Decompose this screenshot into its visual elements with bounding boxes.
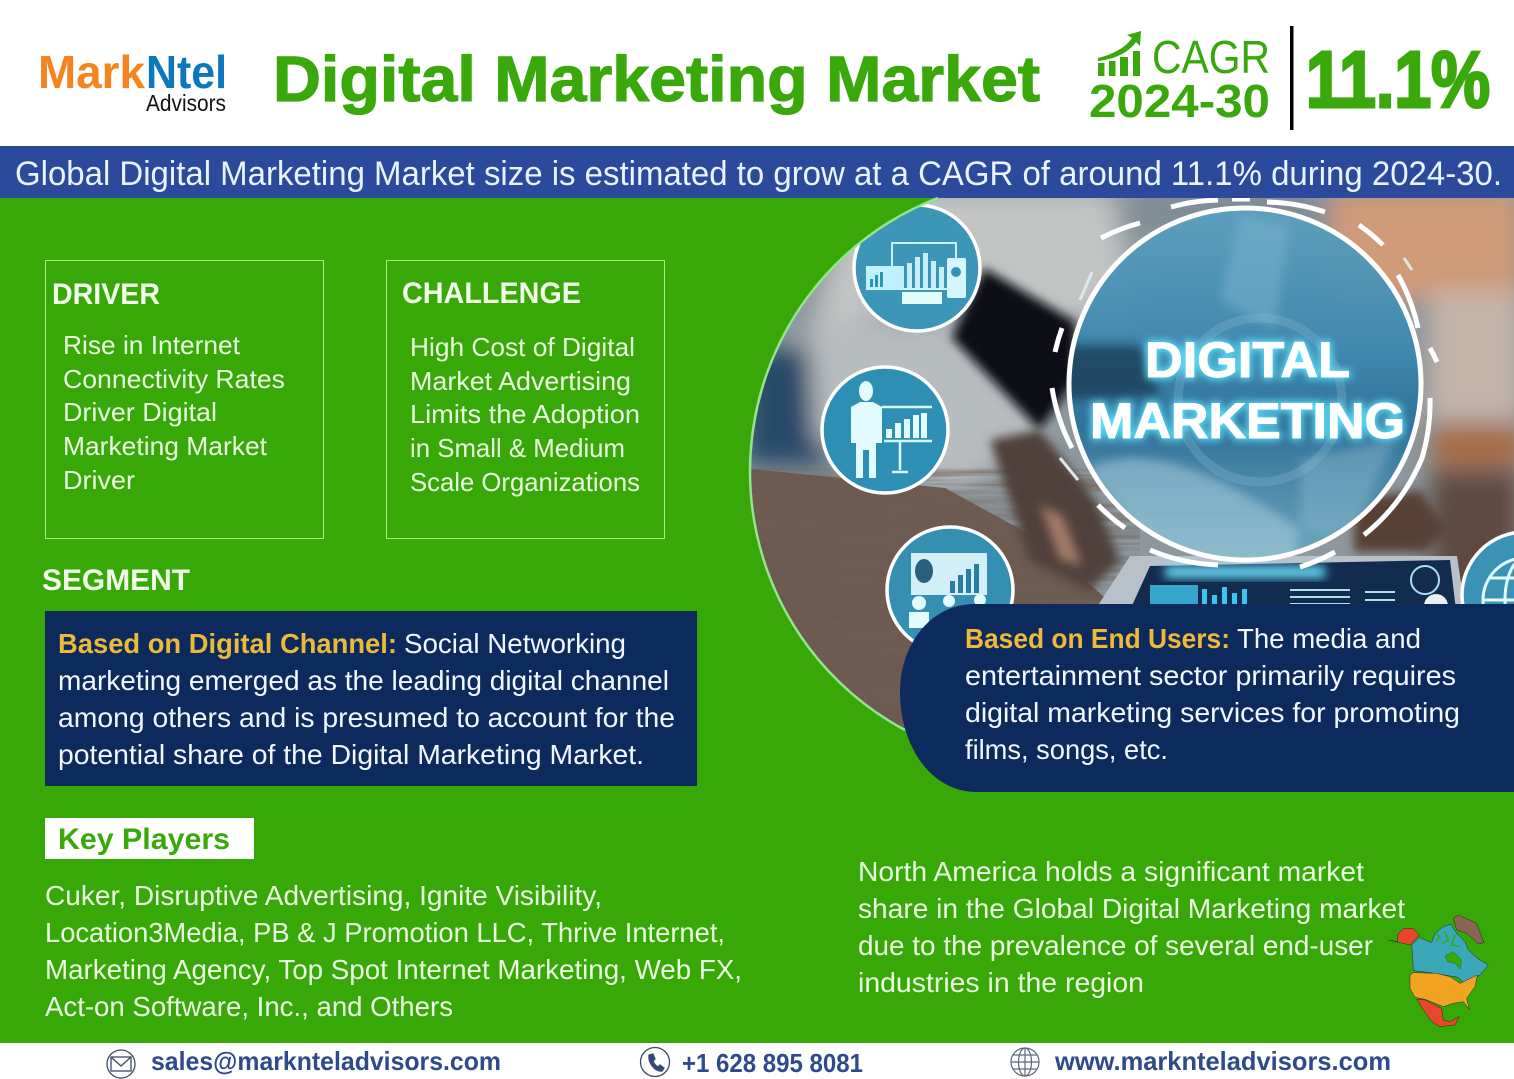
- panel: end users segment: digital marketing services for promoting: [965, 697, 1460, 728]
- icon: team presentation: [887, 527, 1013, 653]
- logo: MarkNtel Advisors: Advisors: [146, 90, 226, 116]
- panel: digital channel segment: marketing emerged as the leading digital channel: [58, 665, 669, 696]
- challenge text: [410, 332, 640, 497]
- lens heading: digital marketing: MARKETING: [1090, 393, 1405, 449]
- logo: MarkNtel Advisors: Ntel: [146, 46, 227, 98]
- panel: digital channel segment: Based on Digital Channel:: [58, 628, 397, 659]
- footer background: [0, 1043, 1514, 1079]
- contact: phone: +1 628 895 8081: [682, 1048, 863, 1078]
- icon: growth bars with arrow: [1098, 31, 1141, 76]
- icon: globe: [1011, 1048, 1039, 1076]
- lens heading: digital marketing: [1090, 332, 1405, 449]
- main lens circle: [1052, 199, 1437, 570]
- icon: presenter with chart: [822, 367, 948, 493]
- panel: digital channel segment: Social Networking: [404, 628, 626, 659]
- panel: end users segment: [900, 604, 1514, 792]
- header background: [0, 0, 1514, 146]
- key players heading: [45, 818, 254, 859]
- photo edge arc: [750, 198, 938, 730]
- panel: digital channel segment: among others and is presumed to account for the: [58, 702, 675, 733]
- driver text: Rise in Internet: [63, 330, 241, 360]
- icon: globe: [1460, 531, 1514, 604]
- CAGR label: CAGR: [1152, 31, 1270, 83]
- driver text: Marketing Market: [63, 431, 268, 461]
- driver text: Connectivity Rates: [63, 364, 285, 394]
- lens heading: digital marketing: DIGITAL: [1145, 332, 1350, 388]
- photo: digital marketing hero: [740, 190, 1514, 750]
- panel: digital channel segment: [45, 611, 697, 786]
- logo: MarkNtel Advisors: [38, 46, 227, 116]
- lens heading: digital marketing: MARKETING: [1090, 393, 1405, 449]
- panel: end users segment: Based on End Users:: [965, 623, 1230, 654]
- icon: North America map: [1388, 915, 1488, 1027]
- panel: end users segment: entertainment sector primarily requires: [965, 660, 1456, 691]
- key players text: Cuker, Disruptive Advertising, Ignite Visibility,: [45, 880, 602, 911]
- driver text: [63, 330, 285, 495]
- driver text: Driver: [63, 465, 135, 495]
- key players text: Marketing Agency, Top Spot Internet Marketing, Web FX,: [45, 954, 742, 985]
- summary banner: Global Digital Marketing Market size is estimated to grow at a CAGR of around 11.1% during 2024-30.: [15, 155, 1502, 193]
- key players heading: Key Players: [58, 823, 230, 856]
- panel: end users segment: The media and: [1237, 623, 1421, 654]
- title: Digital Marketing Market: [273, 43, 1040, 115]
- challenge text: Scale Organizations: [410, 467, 640, 497]
- contact: website: www.marknteladvisors.com: [1054, 1046, 1391, 1076]
- driver text: Driver Digital: [63, 397, 217, 427]
- key players text: [45, 880, 742, 1022]
- green main background: [0, 198, 1514, 1043]
- panel: driver: [46, 260, 324, 538]
- contact: email: sales@marknteladvisors.com: [151, 1046, 501, 1076]
- lens heading: digital marketing: DIGITAL: [1145, 332, 1350, 388]
- challenge text: High Cost of Digital: [410, 332, 635, 362]
- panel: challenge: [386, 260, 664, 538]
- regional text: share in the Global Digital Marketing market: [858, 893, 1405, 924]
- key players text: Location3Media, PB & J Promotion LLC, Thrive Internet,: [45, 917, 725, 948]
- regional text: North America holds a significant market: [858, 856, 1364, 887]
- segment heading: SEGMENT: [42, 564, 190, 597]
- panel: end users segment: films, songs, etc.: [965, 734, 1168, 765]
- key players text: Act-on Software, Inc., and Others: [45, 991, 453, 1022]
- tablet: [1099, 556, 1462, 604]
- divider: [1290, 26, 1294, 130]
- icon: phone: [640, 1048, 670, 1076]
- driver heading: DRIVER: [52, 278, 160, 311]
- icon: devices dashboard: [854, 205, 980, 331]
- challenge text: Market Advertising: [410, 366, 631, 396]
- panel: digital channel segment: potential share of the Digital Marketing Market.: [58, 739, 644, 770]
- challenge text: Limits the Adoption: [410, 399, 640, 429]
- challenge heading: CHALLENGE: [402, 277, 581, 310]
- icon: email: [107, 1050, 135, 1078]
- CAGR period: 2024-30: [1089, 75, 1270, 127]
- regional text: industries in the region: [858, 967, 1144, 998]
- regional text: [858, 856, 1405, 998]
- challenge text: in Small & Medium: [410, 433, 625, 463]
- regional text: due to the prevalence of several end-user: [858, 930, 1373, 961]
- logo: MarkNtel Advisors: Mark: [38, 46, 145, 98]
